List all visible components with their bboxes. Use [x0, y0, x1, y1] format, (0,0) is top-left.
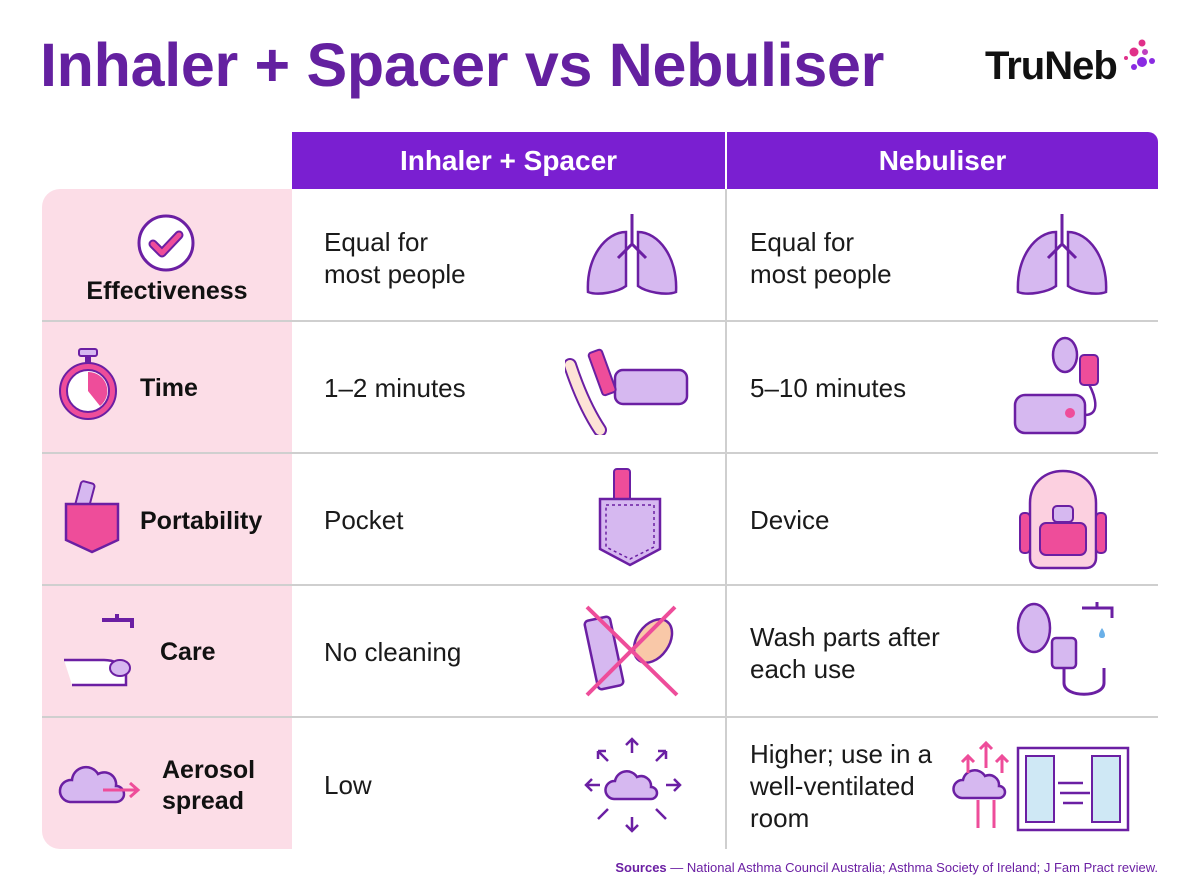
header: nebuliser: Nebuliser: [879, 144, 1006, 176]
text: Equal for: [750, 227, 854, 257]
row label: time: [59, 348, 198, 420]
text: well-ventilated: [750, 771, 915, 801]
left label column: [42, 189, 292, 849]
row label: aerosol spread: [58, 756, 255, 815]
icon: lungs (nebuliser): [1016, 214, 1108, 295]
icon: washing hands: [64, 614, 134, 686]
text: each use: [750, 654, 856, 684]
cell texts: [324, 227, 466, 289]
text: 5–10 minutes: [750, 373, 906, 403]
text: Pocket: [324, 505, 404, 535]
icon: pocket with inhaler: [598, 468, 662, 566]
sources: Sources — National Asthma Council Australia; Asthma Society of Ireland; J Fam Pract review.: [615, 860, 1158, 875]
icon: pocket: [64, 480, 120, 554]
text: Wash parts after: [750, 622, 940, 652]
row label: care: [64, 614, 216, 686]
row label: aerosol spread: spread: [162, 787, 244, 815]
icon: nebuliser machine: [1014, 336, 1099, 434]
icon: cloud arrow: [58, 766, 140, 804]
cell texts: Equal for: [324, 227, 428, 257]
row label: portability: [64, 480, 262, 554]
text: room: [750, 803, 809, 833]
text: No cleaning: [324, 637, 461, 667]
row label: care: Care: [160, 638, 216, 666]
text: most people: [750, 259, 892, 289]
row label: time: Time: [140, 374, 198, 402]
logo: TruNeb: [985, 44, 1117, 88]
cell texts: most people: [324, 259, 466, 289]
icon: nebuliser mask and tap: [1016, 602, 1114, 696]
text: Device: [750, 505, 829, 535]
icon: lungs (inhaler): [586, 214, 678, 295]
row label: portability: Portability: [140, 507, 262, 535]
icon: no cleaning crossed: [584, 606, 678, 696]
header: inhaler + spacer: [292, 132, 725, 189]
title: Inhaler + Spacer vs Nebuliser: [40, 31, 884, 99]
header: inhaler + spacer: Inhaler + Spacer: [400, 144, 617, 176]
row label: aerosol spread: Aerosol: [162, 756, 255, 784]
icon: inhaler with spacer: [565, 348, 688, 435]
row label: effectiveness: Effectiveness: [86, 277, 248, 305]
header: nebuliser: [727, 132, 1158, 189]
icon: cloud and window: [952, 741, 1130, 832]
text: Higher; use in a: [750, 739, 932, 769]
row label: effectiveness: [86, 214, 248, 305]
icon: backpack: [1019, 470, 1107, 570]
icon: cloud with arrows: [584, 737, 682, 833]
icon: stopwatch: [59, 348, 117, 420]
text: Low: [324, 770, 372, 800]
icon: check: [138, 214, 194, 272]
text: 1–2 minutes: [324, 373, 466, 403]
